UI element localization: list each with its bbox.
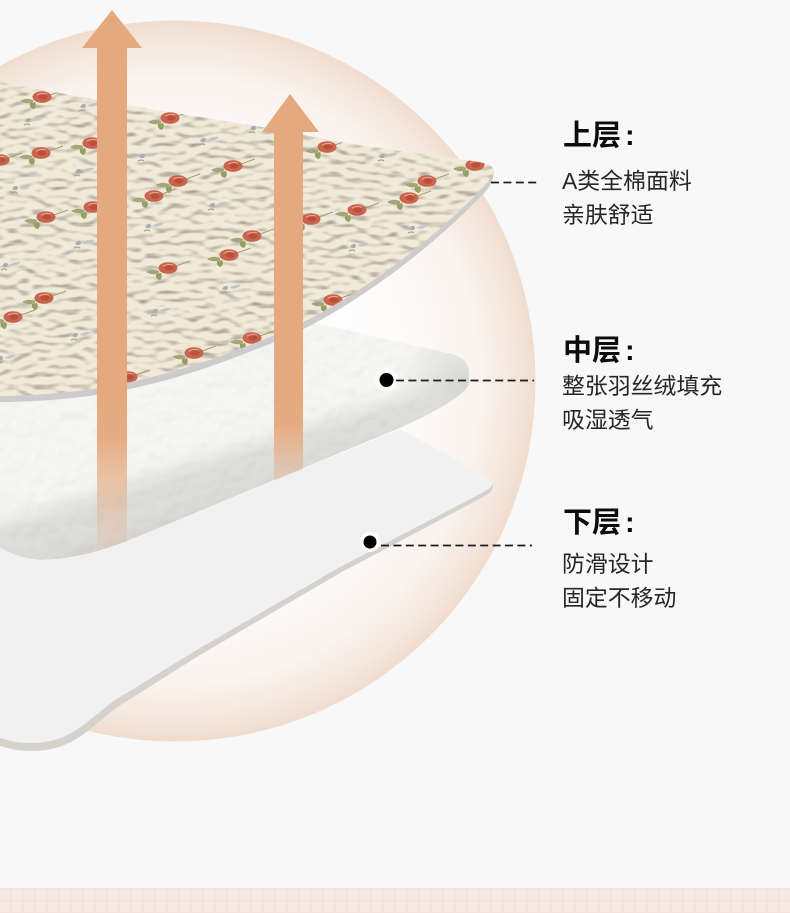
fleece surface (0, 322, 469, 560)
sheet edge (0, 484, 493, 751)
arrow: right upward breathability (262, 94, 319, 520)
fleece shaded corner (418, 350, 469, 404)
middle layer: fleece filling (0, 324, 469, 560)
rose print (0, 90, 497, 389)
text: middle layer description: 整张羽丝绒填充 (562, 373, 722, 399)
text: middle layer description (562, 373, 722, 433)
bottom grid band (0, 888, 790, 913)
text: lower layer description: 防滑设计 (562, 551, 654, 577)
heading: middle layer: 中层: (563, 335, 635, 367)
leader line: upper layer (491, 182, 537, 184)
sheet surface (0, 429, 492, 743)
text: upper layer description: A类全棉面料 (562, 168, 692, 194)
text: upper layer description (562, 168, 692, 228)
fabric surface (0, 82, 494, 396)
text: middle layer description: 吸湿透气 (562, 407, 654, 433)
text: lower layer description: 固定不移动 (562, 585, 676, 611)
text: lower layer description (562, 551, 676, 611)
peach gradient circle (0, 20, 536, 742)
marker and leader line: bottom layer (360, 532, 532, 552)
heading: upper layer: 上层: (563, 120, 635, 152)
marker and leader line: middle layer (375, 368, 534, 392)
fabric edge (0, 88, 494, 402)
bottom layer: anti-slip sheet (0, 429, 493, 751)
top layer: quilted floral fabric (0, 82, 497, 402)
heading: lower layer: 下层: (563, 507, 635, 539)
arrow: left upward breathability (82, 10, 142, 560)
text: upper layer description: 亲肤舒适 (562, 202, 654, 228)
